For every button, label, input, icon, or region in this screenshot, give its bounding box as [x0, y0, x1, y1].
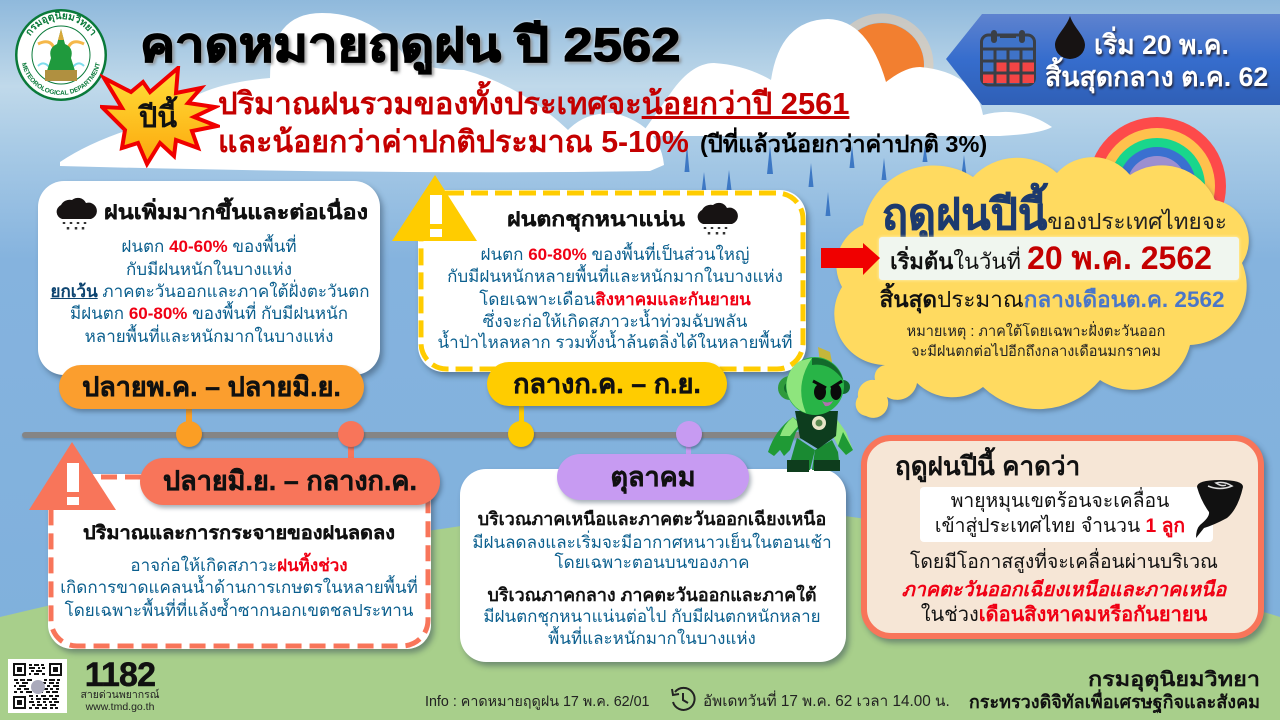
- body text: น้ำป่าไหลหลาก รวมทั้งน้ำล้นตลิ่งได้ในหลายพื้นที่: [438, 333, 792, 352]
- cloud shape: [834, 157, 1253, 423]
- icon: water drop: [1055, 16, 1085, 59]
- body text: หลายพื้นที่และหนักมากในบางแห่ง: [85, 327, 333, 346]
- logo: Meteorological Department seal: [15, 9, 107, 101]
- panel: rainfall increases: [38, 181, 380, 375]
- heading: ฤดูฝนปีนี้ คาดว่า: [895, 451, 1080, 481]
- heading: ฝนตกชุกหนาแน่น: [507, 209, 685, 231]
- hotline 1182: 1182: [85, 656, 155, 694]
- body text: [902, 548, 1227, 626]
- white text box: [920, 487, 1213, 542]
- hotline 1182: www.tmd.go.th: [86, 701, 154, 713]
- marker: mid July: [508, 421, 534, 447]
- heading: ฝนเพิ่มมากขึ้นและต่อเนื่อง: [104, 202, 368, 224]
- body text: ภาคตะวันออกเฉียงเหนือและภาคเหนือ: [902, 579, 1226, 601]
- icon: starburst this year: [100, 66, 220, 168]
- text block north: บริเวณภาคเหนือและภาคตะวันออกเฉียงเหนือ: [478, 509, 826, 529]
- pill: mid July to September: [487, 362, 727, 406]
- body text: มีฝนตก 60-80% ของพื้นที่ กับมีฝนหนัก: [70, 304, 348, 323]
- pill: mid July to September: กลางก.ค. – ก.ย.: [513, 369, 701, 399]
- QR code: [8, 659, 67, 713]
- white text box: เข้าสู่ประเทศไทย จำนวน 1 ลูก: [935, 516, 1185, 537]
- pill: October: [557, 454, 749, 500]
- icon: warning orange: [29, 442, 116, 510]
- callout: rainy season this year: [834, 157, 1253, 423]
- icon: warning yellow: [392, 175, 477, 241]
- panel: tropical storm forecast: [861, 435, 1264, 639]
- arrow: red pointing to start date: [821, 243, 880, 275]
- headline text: ปริมาณฝนรวมของทั้งประเทศจะน้อยกว่าปี 2561: [218, 86, 849, 121]
- organisation credit: กระทรวงดิจิทัลเพื่อเศรษฐกิจและสังคม: [969, 692, 1260, 712]
- rainbow: [1094, 117, 1226, 203]
- body text: ฝนตก 40-60% ของพื้นที่: [121, 237, 297, 256]
- white text box: พายุหมุนเขตร้อนจะเคลื่อน: [951, 491, 1169, 512]
- panel: October: [460, 469, 846, 662]
- panel: dense rain: [418, 190, 806, 372]
- end date: สิ้นสุดประมาณกลางเดือนต.ค. 2562: [880, 287, 1224, 312]
- note: จะมีฝนตกต่อไปอีกถึงกลางเดือนมกราคม: [911, 344, 1161, 360]
- text block north: [472, 509, 832, 572]
- text block central: บริเวณภาคกลาง ภาคตะวันออกและภาคใต้: [488, 585, 816, 605]
- headline text: [218, 81, 987, 159]
- hotline 1182: สายด่วนพยากรณ์: [80, 689, 160, 701]
- text block north: มีฝนลดลงและเริ่มจะมีอากาศหนาวเย็นในตอนเช้า: [472, 533, 832, 552]
- body text: ซึ่งจะก่อให้เกิดสภาวะน้ำท่วมฉับพลัน: [483, 312, 747, 331]
- marker: late May: [176, 421, 202, 447]
- pill: late May to late June: ปลายพ.ค. – ปลายมิ.ย.: [82, 372, 341, 402]
- text block central: พื้นที่และหนักมากในบางแห่ง: [548, 629, 756, 648]
- title: คาดหมายฤดูฝน ปี 2562: [140, 18, 680, 71]
- icon: starburst this year: ปีนี้: [137, 95, 178, 134]
- body text: โดยเฉพาะพื้นที่ที่แล้งซ้ำซากนอกเขตชลประทาน: [65, 601, 413, 620]
- icon: calendar: [980, 30, 1036, 86]
- body text: โดยมีโอกาสสูงที่จะเคลื่อนผ่านบริเวณ: [910, 552, 1218, 573]
- body text: เกิดการขาดแคลนน้ำด้านการเกษตรในหลายพื้นที่: [60, 578, 418, 597]
- organisation credit: [969, 669, 1260, 714]
- banner: season start and end: [946, 14, 1280, 105]
- body text: ในช่วงเดือนสิงหาคมหรือกันยายน: [921, 604, 1207, 626]
- headline text: (ปีที่แล้วน้อยกว่าค่าปกติ 3%): [700, 131, 987, 157]
- note: หมายเหตุ : ภาคใต้โดยเฉพาะฝั่งตะวันออก: [907, 324, 1165, 340]
- body text: โดยเฉพาะเดือนสิงหาคมและกันยายน: [479, 290, 751, 309]
- icon: tornado: [1196, 480, 1243, 538]
- body text: กับมีฝนหนักในบางแห่ง: [126, 260, 292, 279]
- update time: อัพเดทวันที่ 17 พ.ค. 62 เวลา 14.00 น.: [703, 693, 950, 710]
- body text: [60, 552, 418, 620]
- heading: ปริมาณและการกระจายของฝนลดลง: [83, 523, 395, 544]
- hotline 1182: [80, 656, 160, 713]
- logo: Meteorological Department seal: METEOROLOGICAL DEPARTMENT: [22, 62, 100, 95]
- pill: October: ตุลาคม: [610, 462, 696, 492]
- body text: [438, 242, 792, 352]
- text block central: [483, 584, 821, 648]
- icon: rain cloud: [698, 202, 738, 234]
- body text: กับมีฝนหนักหลายพื้นที่และหนักมากในบางแห่ง: [447, 267, 783, 286]
- note: [907, 321, 1165, 360]
- marker: late June: [338, 421, 364, 447]
- icon: rain cloud: [56, 198, 97, 230]
- headline text: และน้อยกว่าค่าปกติประมาณ 5-10%: [218, 126, 689, 159]
- body text: อาจก่อให้เกิดสภาวะฝนทิ้งช่วง: [130, 556, 348, 575]
- icon: clock update: [671, 686, 696, 711]
- source info: Info : คาดหมายฤดูฝน 17 พ.ค. 62/01: [425, 694, 650, 710]
- body text: ฝนตก 60-80% ของพื้นที่เป็นส่วนใหญ่: [481, 245, 749, 264]
- body text: [50, 234, 370, 346]
- rain drops: [684, 146, 966, 216]
- banner text start: เริ่ม 20 พ.ค.: [1094, 30, 1229, 60]
- timeline: [21, 406, 802, 458]
- organisation credit: กรมอุตุนิยมวิทยา: [1088, 669, 1260, 691]
- text block north: โดยเฉพาะตอนบนของภาค: [555, 553, 749, 572]
- heading: ฤดูฝนปีนี้ของประเทศไทยจะ: [882, 191, 1227, 239]
- marker: October: [676, 421, 702, 447]
- icon: green robot mascot: [768, 347, 853, 472]
- text block central: มีฝนตกชุกหนาแน่นต่อไป กับมีฝนตกหนักหลาย: [483, 607, 821, 626]
- banner text end: สิ้นสุดกลาง ต.ค. 62: [1045, 62, 1268, 92]
- start date box: เริ่มต้นในวันที่ 20 พ.ค. 2562: [890, 240, 1212, 276]
- body text: ยกเว้น ภาคตะวันออกและภาคใต้ฝั่งตะวันตก: [50, 282, 370, 301]
- panel: rainfall decreases: [48, 474, 431, 649]
- pill: late May to late June: [59, 365, 364, 409]
- pill: late June to mid July: ปลายมิ.ย. – กลางก.ค.: [163, 466, 417, 496]
- pill: late June to mid July: [140, 458, 440, 505]
- logo: Meteorological Department seal: กรมอุตุนิยมวิทยา: [26, 12, 96, 36]
